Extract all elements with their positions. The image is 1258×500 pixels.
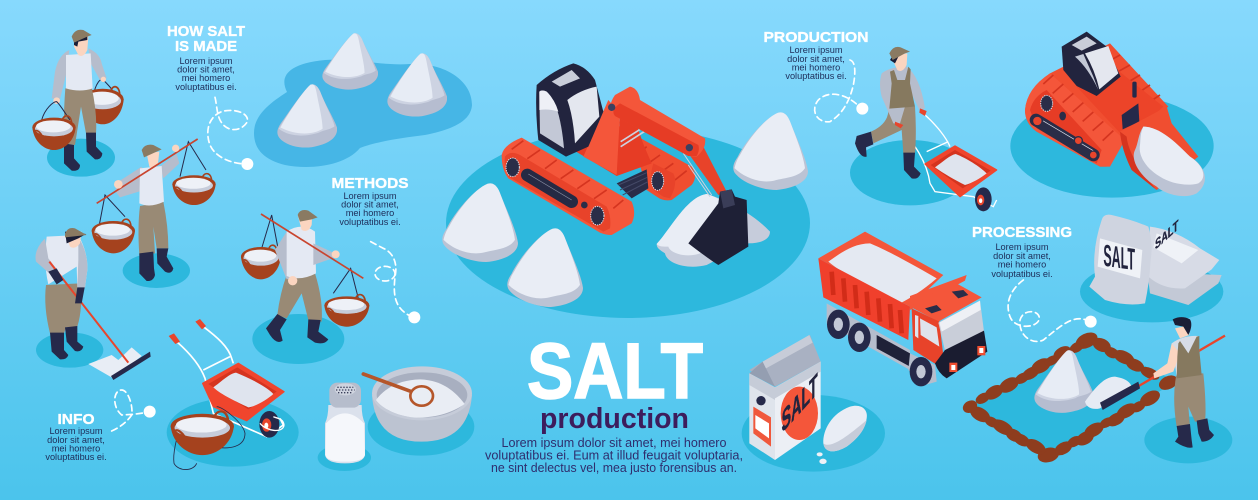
salt heap bbox=[442, 183, 518, 262]
ground ellipse bbox=[446, 128, 810, 318]
worker walking with pole and baskets bbox=[241, 210, 369, 364]
body text: voluptatibus ei. bbox=[339, 217, 401, 227]
salt bags: SALT bbox=[1103, 238, 1135, 277]
dashed connector: processing bbox=[1008, 280, 1097, 341]
dashed connectors left bbox=[112, 97, 420, 431]
connector: methods bbox=[371, 242, 420, 323]
heading: PROCESSING bbox=[972, 224, 1072, 241]
production text bbox=[764, 29, 868, 81]
body text: voluptatibus ei. bbox=[45, 452, 107, 462]
wheelbarrow with basket bbox=[167, 319, 299, 470]
body text: voluptatibus ei. bbox=[991, 269, 1053, 279]
connector: how salt is made bbox=[208, 97, 253, 170]
heading: PRODUCTION bbox=[764, 29, 868, 46]
salt heap bbox=[733, 112, 808, 190]
subtitle: production bbox=[540, 403, 689, 435]
body text: mei homero bbox=[998, 260, 1046, 270]
connector: info bbox=[112, 390, 156, 431]
salt carton with chunk bbox=[742, 335, 885, 472]
stone salt pan with worker bbox=[963, 317, 1232, 463]
processing text bbox=[972, 224, 1072, 279]
body text: dolor sit amet, bbox=[787, 54, 845, 64]
bowl of salt with spoon bbox=[363, 366, 474, 456]
body text: Lorem ipsum bbox=[789, 45, 843, 55]
salt carton with chunk: SALT bbox=[782, 367, 818, 440]
dump truck with salt bbox=[818, 232, 987, 386]
salt shaker bbox=[318, 383, 371, 471]
body text: Lorem ipsum bbox=[995, 242, 1049, 252]
body text: dolor sit amet, bbox=[177, 64, 235, 74]
excavator with heap under bucket bbox=[502, 63, 770, 267]
worker sweeping salt bbox=[36, 228, 151, 380]
body text: dolor sit amet, bbox=[993, 251, 1051, 261]
dashed connector: production bbox=[815, 60, 868, 122]
body text: mei homero bbox=[52, 444, 100, 454]
body text: voluptatibus ei. bbox=[785, 71, 847, 81]
body text: Lorem ipsum bbox=[179, 56, 233, 66]
body text: dolor sit amet, bbox=[47, 435, 105, 445]
bag label text: SALT bbox=[1155, 216, 1178, 253]
worker with two baskets bbox=[32, 30, 124, 177]
body text: dolor sit amet, bbox=[341, 200, 399, 210]
title: SALT bbox=[527, 326, 703, 415]
worker carrying pole with baskets bbox=[92, 139, 216, 288]
body text: mei homero bbox=[792, 62, 840, 72]
production worker with wheelbarrow bbox=[850, 47, 997, 211]
description: voluptatibus ei. Eum at illud feugait voluptaria, bbox=[485, 448, 743, 462]
body text: voluptatibus ei. bbox=[175, 82, 237, 92]
how salt is made text bbox=[167, 23, 245, 92]
body text: Lorem ipsum bbox=[343, 191, 397, 201]
heading: INFO bbox=[58, 411, 95, 428]
salt bags bbox=[1080, 215, 1223, 322]
body text: mei homero bbox=[346, 208, 394, 218]
methods text bbox=[332, 175, 408, 227]
heading: METHODS bbox=[332, 175, 408, 192]
pond with salt heaps bbox=[254, 33, 472, 167]
heading: HOW SALT bbox=[167, 23, 245, 40]
info text bbox=[45, 411, 107, 462]
body text: mei homero bbox=[182, 73, 230, 83]
description: ne sint delectus vel, mea justo forensibus an. bbox=[491, 461, 737, 475]
description: Lorem ipsum dolor sit amet, mei homero bbox=[502, 436, 727, 450]
bulldozer with salt bbox=[1010, 32, 1214, 198]
heading: IS MADE bbox=[175, 38, 237, 55]
main title block bbox=[485, 326, 743, 475]
excavator area with salt heaps bbox=[442, 63, 810, 318]
body text: Lorem ipsum bbox=[49, 426, 103, 436]
salt heap bbox=[507, 228, 583, 307]
